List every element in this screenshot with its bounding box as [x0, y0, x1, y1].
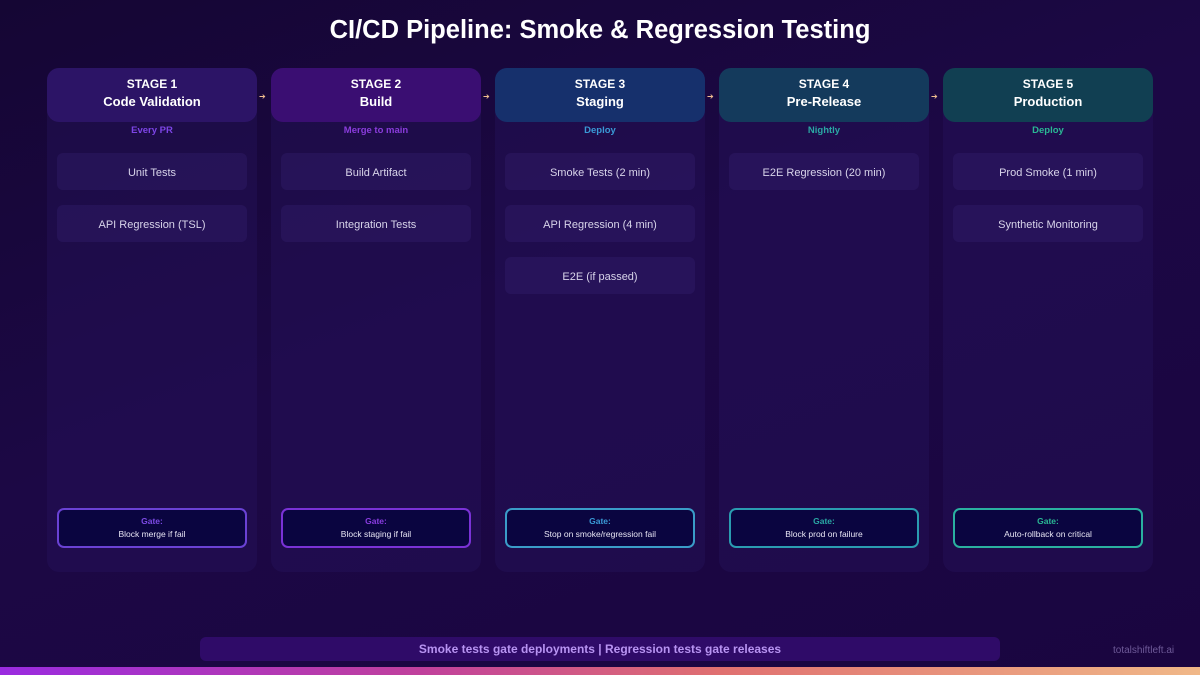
item: synthetic monitoring: Synthetic Monitoring — [998, 219, 1098, 231]
item: e2e — [505, 257, 695, 294]
panel: stage 1 — [47, 68, 257, 572]
panel: stage 3 — [495, 68, 705, 572]
item: smoke tests — [505, 153, 695, 190]
stage 3 trigger: Deploy — [584, 125, 616, 136]
item: e2e regression — [729, 153, 919, 190]
stage 1 header — [47, 68, 257, 122]
arrow 3-4: ➔ — [707, 92, 714, 101]
gate 3: Stop on smoke/regression fail — [544, 529, 656, 539]
item: api regression — [57, 205, 247, 242]
stage 2 header: Build — [360, 94, 392, 109]
gate 1: Block merge if fail — [118, 529, 186, 539]
panel: stage 4 — [719, 68, 929, 572]
panel: stage 2 — [271, 68, 481, 572]
stage 2 header — [271, 68, 481, 122]
item: build artifact — [281, 153, 471, 190]
gate 4: Gate: — [813, 516, 835, 526]
stage 2 trigger: Merge to main — [344, 125, 408, 136]
item: integration tests: Integration Tests — [336, 219, 416, 231]
stage 3 header: STAGE 3 — [575, 77, 625, 91]
stage 4 header: Pre-Release — [787, 94, 861, 109]
item: integration tests — [281, 205, 471, 242]
gate 2: Block staging if fail — [341, 529, 411, 539]
stage 5 header: STAGE 5 — [1023, 77, 1073, 91]
stage 1 header: STAGE 1 — [127, 77, 177, 91]
arrow 1-2: ➔ — [259, 92, 266, 101]
item: e2e: E2E (if passed) — [562, 271, 638, 283]
brand: totalshiftleft.ai — [1113, 645, 1174, 656]
gate 1: Gate: — [141, 516, 163, 526]
item: api regression: API Regression (TSL) — [98, 219, 205, 231]
footer banner — [200, 637, 1000, 661]
item: synthetic monitoring — [953, 205, 1143, 242]
arrow 2-3: ➔ — [483, 92, 490, 101]
gate 4 — [729, 508, 919, 548]
gate 5: Auto-rollback on critical — [1004, 529, 1092, 539]
item: unit tests — [57, 153, 247, 190]
gate 2 — [281, 508, 471, 548]
item: prod smoke — [953, 153, 1143, 190]
gate 1 — [57, 508, 247, 548]
gate 3 — [505, 508, 695, 548]
title: CI/CD Pipeline: Smoke & Regression Testing — [330, 16, 870, 44]
gate 4: Block prod on failure — [785, 529, 863, 539]
gate 5: Gate: — [1037, 516, 1059, 526]
stage 1 trigger: Every PR — [131, 125, 173, 136]
item: build artifact: Build Artifact — [345, 167, 407, 179]
stage 5 header: Production — [1014, 94, 1082, 109]
panel: stage 5 — [943, 68, 1153, 572]
stage 4 header: STAGE 4 — [799, 77, 849, 91]
item: prod smoke: Prod Smoke (1 min) — [999, 167, 1097, 179]
stage 5 header — [943, 68, 1153, 122]
gate 3: Gate: — [589, 516, 611, 526]
item: unit tests: Unit Tests — [128, 167, 176, 179]
stage 3 header — [495, 68, 705, 122]
gate 5 — [953, 508, 1143, 548]
item: smoke tests: Smoke Tests (2 min) — [550, 167, 650, 179]
stage 4 trigger: Nightly — [808, 125, 840, 136]
stage 4 header — [719, 68, 929, 122]
footer banner: Smoke tests gate deployments | Regression tests gate releases — [419, 642, 781, 656]
gate 2: Gate: — [365, 516, 387, 526]
item: e2e regression: E2E Regression (20 min) — [763, 167, 885, 179]
item: api regression: API Regression (4 min) — [543, 219, 657, 231]
stage 1 header: Code Validation — [103, 94, 201, 109]
item: api regression — [505, 205, 695, 242]
stage 5 trigger: Deploy — [1032, 125, 1064, 136]
arrow 4-5: ➔ — [931, 92, 938, 101]
stage 2 header: STAGE 2 — [351, 77, 401, 91]
stage 3 header: Staging — [576, 94, 624, 109]
